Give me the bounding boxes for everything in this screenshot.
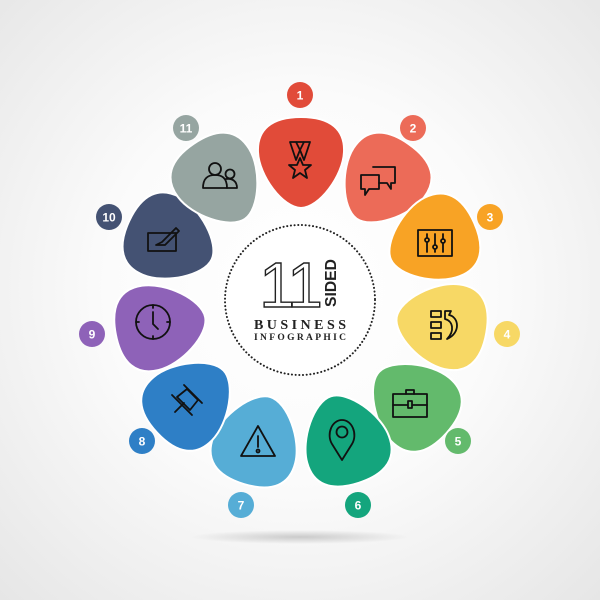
badge 5 (445, 428, 471, 454)
icon: users (203, 163, 237, 188)
floor shadow (190, 530, 410, 544)
badge 10 (96, 204, 122, 230)
badge 4 (494, 321, 520, 347)
title number 11: 1 (287, 249, 323, 321)
petal 4 (389, 275, 494, 375)
icon: warning (241, 426, 275, 456)
icons (136, 142, 457, 460)
badge 9: 9 (89, 328, 96, 342)
petal 11 (158, 120, 280, 243)
badge 11: 11 (180, 122, 193, 136)
badge 8 (129, 428, 155, 454)
title number 11 (259, 249, 323, 321)
icon: chat bubbles (361, 167, 395, 195)
petal 3 (373, 183, 492, 299)
badge 8: 8 (139, 434, 146, 448)
badge 9 (79, 321, 105, 347)
icon: pen on board (148, 228, 179, 251)
badge 11 (173, 115, 199, 141)
badge 10: 10 (102, 210, 116, 224)
badge 1: 1 (297, 88, 304, 102)
icon: location pin (330, 420, 354, 460)
title INFOGRAPHIC: INFOGRAPHIC (254, 333, 346, 343)
center circle (225, 225, 375, 375)
badge 3: 3 (487, 210, 494, 224)
petal 1 (258, 117, 344, 208)
number badges (79, 82, 520, 518)
icon: push pin (172, 385, 202, 415)
badge 2 (400, 115, 426, 141)
icon: briefcase (393, 390, 427, 417)
title BUSINESS: BUSINESS (254, 318, 346, 333)
badge 6: 6 (355, 498, 362, 512)
icon: medal (289, 142, 311, 178)
petal 9 (108, 275, 213, 377)
petal 10 (111, 182, 230, 298)
petal 7 (203, 384, 312, 497)
badge 1 (287, 82, 313, 108)
badge 4: 4 (504, 328, 511, 342)
badge 7: 7 (238, 498, 245, 512)
title SIDED: SIDED (323, 259, 340, 307)
icon: clock (136, 305, 170, 339)
badge 2: 2 (410, 122, 417, 136)
petal 6 (290, 383, 400, 496)
icon: list with arrow (431, 311, 457, 339)
petal 5 (350, 340, 475, 465)
icon: sliders (418, 230, 452, 256)
petal 8 (128, 339, 253, 464)
badge 3 (477, 204, 503, 230)
badge 7 (228, 492, 254, 518)
petal 2 (321, 119, 444, 243)
petals (108, 117, 494, 497)
badge 5: 5 (455, 434, 462, 448)
badge 6 (345, 492, 371, 518)
title number 11: 1 (259, 249, 295, 321)
